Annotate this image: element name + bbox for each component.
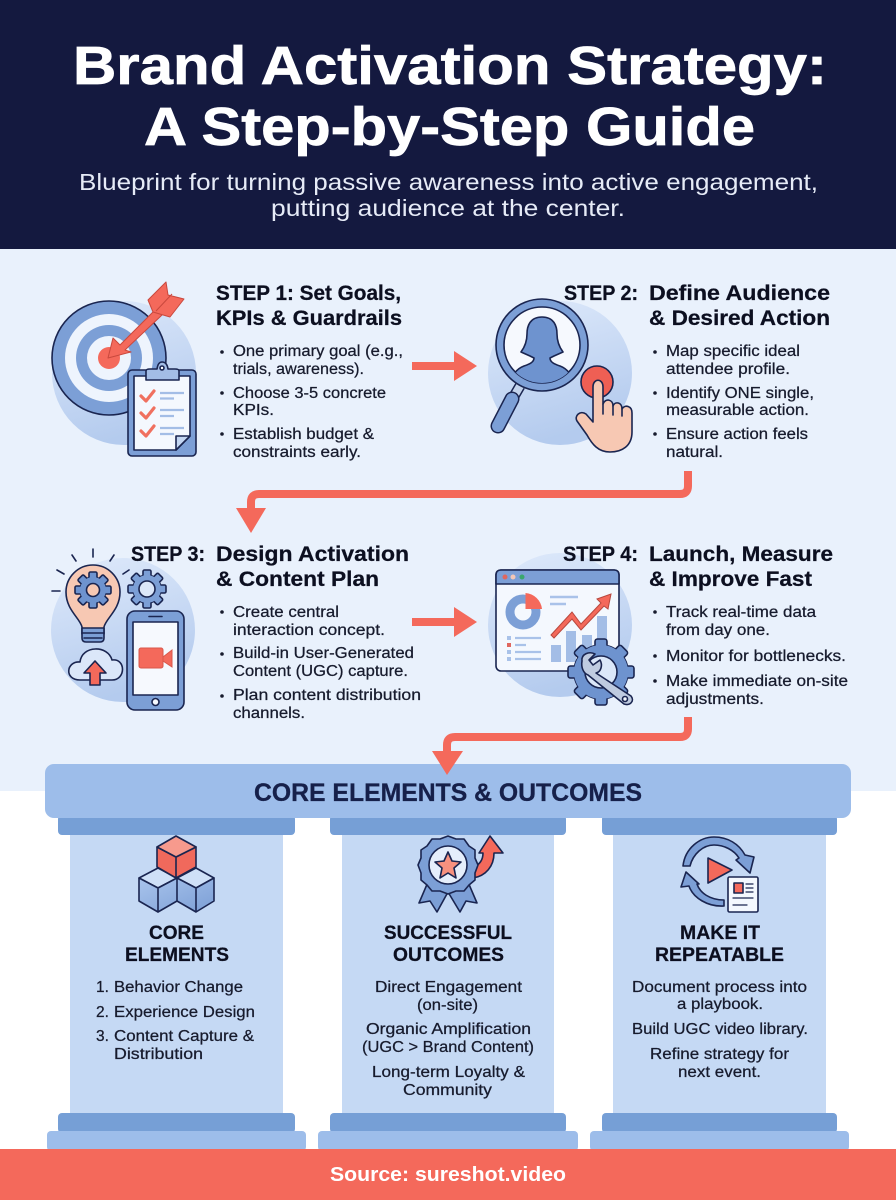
heading: successful outcomes: OUTCOMES [393,944,504,966]
icon: target and clipboard [52,282,196,456]
icon: side gear [128,570,166,608]
banner: core elements and outcomes: CORE ELEMENTS & OUTCOMES [254,779,642,807]
heading: step 4: STEP 4: [563,543,638,566]
icon: gear [568,639,634,705]
text block: outcomes list: Organic Amplification [366,1021,531,1038]
heading: step 2: & Desired Action [649,307,830,330]
text block: repeatable list: next event. [678,1064,761,1081]
text block: core elements list: 1. [96,979,109,996]
text block: step 4 bullets: Monitor for bottlenecks. [666,648,846,665]
heading: make it repeatable: MAKE IT [680,922,760,944]
text block: step 3 bullets: channels. [233,705,305,722]
text block: core elements list: Behavior Change [114,979,243,996]
text block: step 2 bullets: natural. [666,444,723,461]
heading: step 4: Launch, Measure [649,543,833,566]
banner: core elements and outcomes [45,764,851,818]
heading: step 2: STEP 2: [564,282,638,305]
text block: step 3 bullets: Create central [233,604,339,621]
text block: step 1 bullets: Choose 3-5 concrete [233,385,386,402]
text block: step 2 bullets: Identify ONE single, [666,385,814,402]
text block: step 2 bullets: Ensure action feels [666,426,808,443]
footer: source: Source: sureshot.video [330,1164,566,1186]
heading: step 1: STEP 1: Set Goals, [216,282,401,305]
text block: core elements list: Content Capture & [114,1028,255,1045]
text block: step 2 bullets: attendee profile. [666,361,790,378]
text block: repeatable list: a playbook. [677,996,763,1013]
subtitle [79,169,818,221]
text block: step 1 bullets: One primary goal (e.g., [233,343,403,360]
text block: outcomes list: (UGC > Brand Content) [362,1039,534,1056]
heading: step 2 [564,282,830,330]
title: A Step-by-Step Guide [144,97,755,157]
text block: outcomes list: Long-term Loyalty & [372,1064,526,1081]
heading: successful outcomes: SUCCESSFUL [384,922,512,944]
icon: bulb gear [75,572,111,608]
icon: cubes [139,836,214,912]
text block: step 4 bullets: from day one. [666,622,770,639]
text block: outcomes list: Community [403,1082,492,1099]
subtitle: putting audience at the center. [271,195,625,221]
icon: magnifier and tap [488,299,632,452]
icon: medal and arrow [418,836,503,912]
heading: step 3: STEP 3: [131,543,205,566]
heading: step 3: Design Activation [216,543,409,566]
icon: wrench [582,653,632,704]
icon: dashboard and wrench gear [488,553,634,705]
heading: core elements [125,922,229,966]
text block: step 3 bullets: interaction concept. [233,622,385,639]
heading: step 2: Define Audience [649,282,830,305]
text block: step 4 bullets: adjustments. [666,691,764,708]
heading: step 4 [563,543,833,591]
text block: step 1 bullets: constraints early. [233,444,361,461]
heading: step 3: & Content Plan [216,568,379,591]
heading: step 1 [216,282,402,330]
text block: core elements list: 2. [96,1004,109,1021]
subtitle: Blueprint for turning passive awareness into active engagement, [79,169,818,195]
panel: step 4 [488,543,848,708]
heading: make it repeatable [655,922,784,966]
heading: step 1: KPIs & Guardrails [216,307,402,330]
text block: step 4 bullets: Track real-time data [666,604,816,621]
text block: step 2 bullets: measurable action. [666,402,809,419]
arrow: step 1 to step 2 [412,351,477,381]
icon: repeat, play, document [681,837,758,912]
text block: outcomes list: Direct Engagement [375,979,523,996]
heading: core elements: CORE [149,922,204,944]
footer: source [0,1149,896,1200]
text block: step 1 bullets [220,343,403,461]
panel: step 3 [51,543,421,722]
icon: phone [127,611,184,710]
text block: core elements list: 3. [96,1028,109,1045]
arrow: step 2 to step 3 [236,471,688,533]
text block: step 2 bullets: Map specific ideal [666,343,800,360]
heading: make it repeatable: REPEATABLE [655,944,784,966]
text block: step 1 bullets: trials, awareness). [233,361,364,378]
text block: core elements list: Experience Design [114,1004,255,1021]
text block: step 4 bullets: Make immediate on-site [666,673,848,690]
text block: step 1 bullets: KPIs. [233,402,274,419]
text block: outcomes list [362,979,534,1099]
text block: repeatable list [632,979,808,1081]
text block: step 3 bullets: Content (UGC) capture. [233,663,408,680]
text block: repeatable list: Refine strategy for [650,1046,789,1063]
text block: step 2 bullets [653,343,814,461]
icon: bulb, gear, phone, cloud [51,549,195,710]
icon: cloud upload [69,649,122,685]
panel: column 2 successful outcomes [318,815,578,1151]
title: Brand Activation Strategy: [73,36,827,96]
panel: column 3 make it repeatable [590,815,849,1151]
arrow: step 3 to step 4 [412,607,477,637]
text block: core elements list [96,979,255,1063]
panel: step 1 [52,282,403,461]
heading: step 3 [131,543,409,591]
text block: outcomes list: (on-site) [417,997,478,1014]
text block: repeatable list: Document process into [632,979,807,996]
text block: core elements list: Distribution [114,1046,203,1063]
text block: repeatable list: Build UGC video library. [632,1021,808,1038]
panel: column 1 core elements [47,815,306,1151]
text block: step 3 bullets: Build-in User-Generated [233,645,414,662]
heading: step 4: & Improve Fast [649,568,812,591]
text block: step 4 bullets [653,604,848,708]
text block: step 3 bullets [220,604,421,722]
text block: step 1 bullets: Establish budget & [233,426,375,443]
panel: step 2 [488,282,830,461]
panel: header [0,0,896,249]
panel: steps background [0,249,896,791]
arrow: step 4 to core elements [432,717,688,775]
text block: step 3 bullets: Plan content distribution [233,687,421,704]
heading: successful outcomes [384,922,512,966]
heading: core elements: ELEMENTS [125,944,229,966]
title [73,36,827,157]
